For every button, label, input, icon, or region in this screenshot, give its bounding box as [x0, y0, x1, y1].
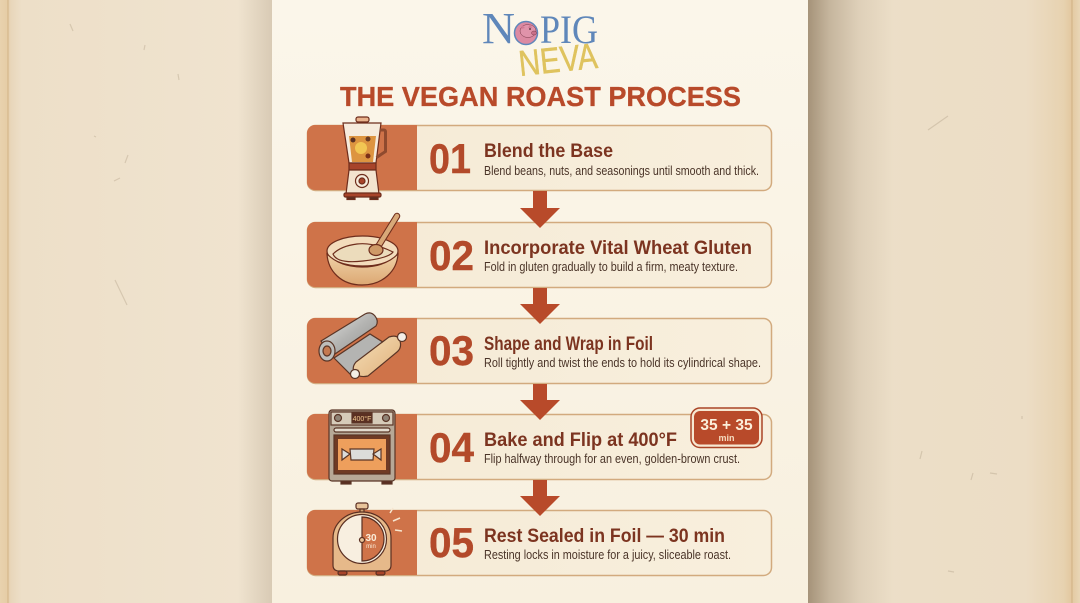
step heading: Bake and Flip at 400°F [484, 430, 677, 451]
arrow 4 [520, 480, 560, 516]
step description: Roll tightly and twist the ends to hold its cylindrical shape. [484, 355, 761, 370]
logo: No Pig Neva [482, 4, 599, 84]
time badge: min [718, 433, 735, 443]
step 2 [307, 216, 772, 288]
step description: Resting locks in moisture for a juicy, sliceable roast. [484, 547, 731, 562]
icon: foil and roll [319, 313, 406, 378]
time badge: 35 + 35 [700, 417, 753, 434]
logo: No Pig Neva: PIG [540, 7, 598, 52]
step number: 01 [429, 135, 471, 182]
icon: mixing bowl [327, 216, 398, 285]
arrow 1 [520, 191, 560, 228]
logo: No Pig Neva: NEVA [517, 35, 599, 84]
step heading: Rest Sealed in Foil — 30 min [484, 526, 725, 547]
step number: 04 [429, 424, 475, 471]
step description: Fold in gluten gradually to build a firm, meaty texture. [484, 259, 738, 274]
step 4 [307, 408, 772, 484]
center poster panel [272, 0, 808, 603]
step description: Blend beans, nuts, and seasonings until smooth and thick. [484, 163, 759, 178]
step 1 [307, 117, 772, 200]
arrow 3 [520, 384, 560, 420]
step heading: Blend the Base [484, 141, 613, 162]
step heading: Shape and Wrap in Foil [484, 334, 653, 355]
step number: 02 [429, 232, 474, 279]
step 5 [307, 503, 772, 576]
step 3 [307, 313, 772, 384]
step description: Flip halfway through for an even, golden-brown crust. [484, 451, 740, 466]
logo: No Pig Neva: N [482, 4, 515, 53]
icon: blender [343, 117, 386, 200]
arrow 2 [520, 288, 560, 324]
step heading: Incorporate Vital Wheat Gluten [484, 238, 752, 259]
icon: kitchen timer: min [366, 544, 376, 550]
icon: oven [329, 410, 395, 484]
step number: 03 [429, 327, 474, 374]
step number: 05 [429, 519, 474, 566]
icon: oven: 400°F [353, 415, 371, 423]
time badge [691, 408, 762, 448]
icon: kitchen timer [333, 503, 402, 575]
icon: pig [514, 22, 538, 44]
title: THE VEGAN ROAST PROCESS [340, 81, 741, 112]
icon: kitchen timer: 30 [365, 533, 377, 544]
